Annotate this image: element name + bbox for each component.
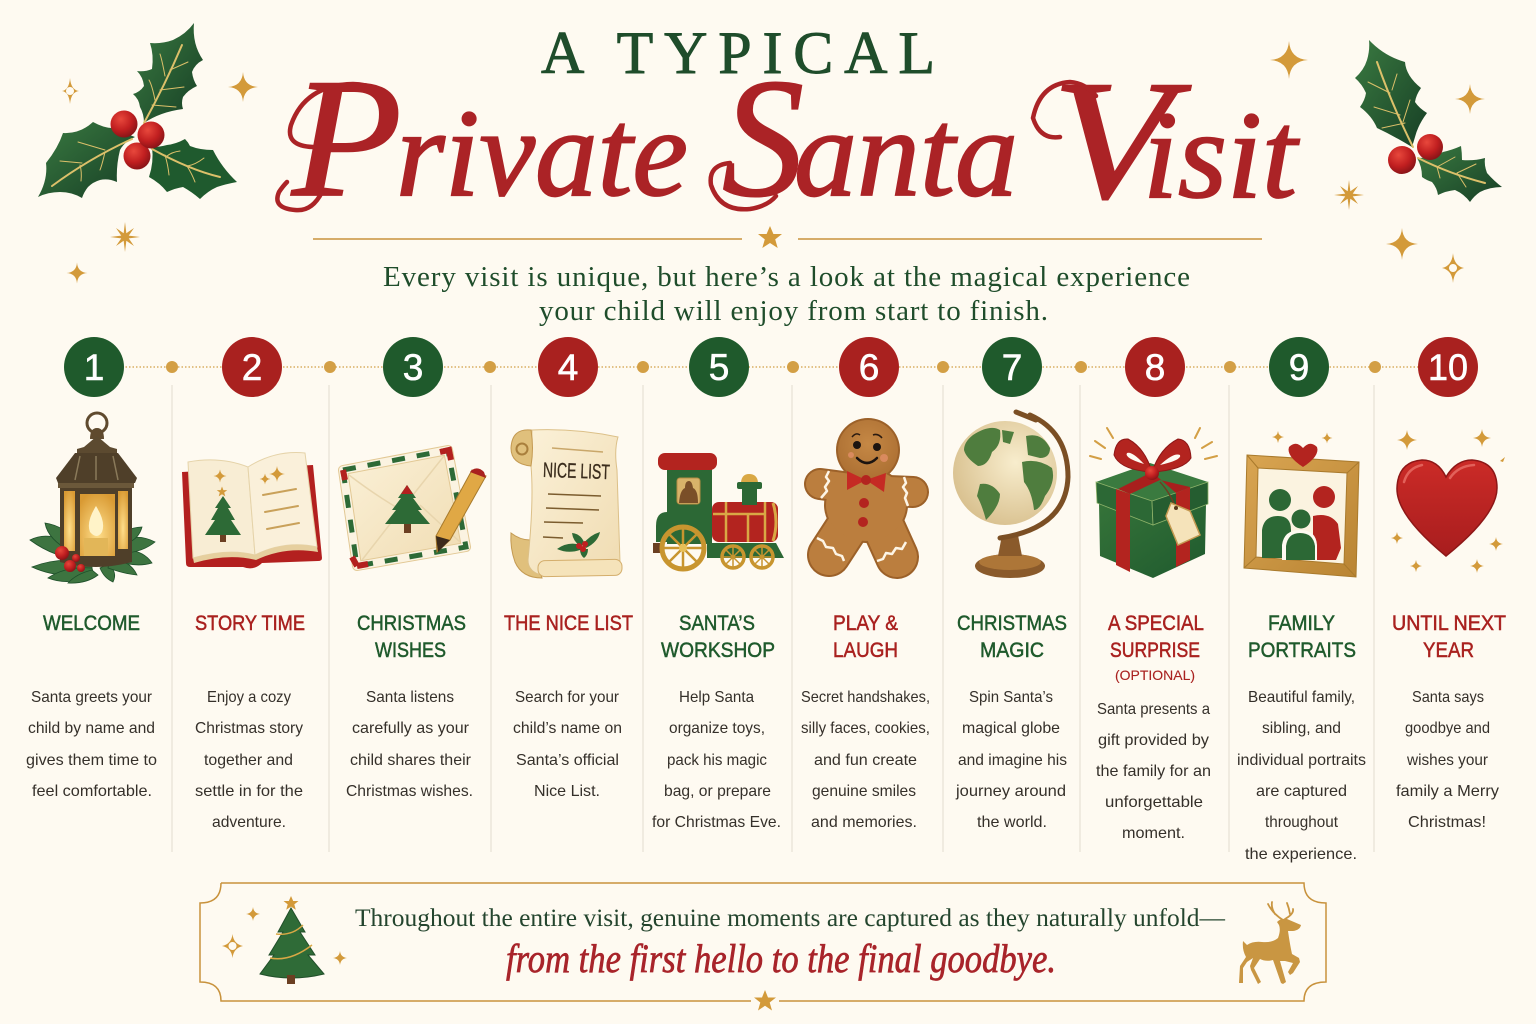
heading: family portraits: PORTRAITS — [1248, 639, 1356, 662]
description: Help Santa — [679, 689, 754, 706]
badge 8 — [1125, 337, 1185, 397]
badge 6: 6 — [859, 347, 879, 388]
panel: step 7 christmas magic — [953, 337, 1068, 831]
title: isit — [1143, 87, 1300, 225]
panel: closing banner — [200, 883, 1326, 1010]
description: together and — [204, 752, 293, 769]
timeline connector — [94, 361, 1448, 852]
description: pack his magic — [667, 752, 767, 769]
description: feel comfortable. — [32, 783, 152, 800]
panel: step 10 until next year — [1391, 337, 1506, 831]
icon: letter and pencil — [343, 450, 486, 566]
sparkles top left — [62, 72, 258, 284]
heading: a special surprise: SURPRISE — [1110, 639, 1200, 662]
description — [1396, 689, 1499, 831]
icon: wrapped gift — [1090, 428, 1217, 578]
heading: christmas wishes — [357, 612, 466, 662]
description — [652, 689, 781, 831]
badge 1: 1 — [84, 347, 104, 388]
badge 7: 7 — [1002, 347, 1022, 388]
icon: nice list scroll — [511, 430, 622, 578]
description: adventure. — [212, 814, 286, 831]
title: A TYPICAL — [541, 20, 935, 86]
description: for Christmas Eve. — [652, 814, 781, 831]
heading: welcome: WELCOME — [43, 612, 140, 635]
heading: christmas magic: CHRISTMAS — [957, 612, 1067, 635]
panel: step 3 christmas wishes — [343, 337, 486, 800]
icon: toy train — [653, 453, 784, 569]
description: Christmas wishes. — [346, 783, 473, 800]
badge 4: 4 — [558, 347, 578, 388]
badge 9: 9 — [1289, 347, 1309, 388]
description: Secret handshakes, — [801, 689, 930, 706]
heading: play and laugh — [833, 612, 898, 662]
heading: play and laugh: PLAY & — [833, 612, 898, 635]
badge 5 — [689, 337, 749, 397]
subtitle: Every visit is unique, but here’s a look at the magical experience — [383, 261, 1190, 293]
description: journey around — [955, 783, 1066, 800]
description: are captured — [1256, 783, 1347, 800]
description: child’s name on — [513, 720, 622, 737]
description: unforgettable — [1105, 794, 1203, 811]
heading: christmas magic: MAGIC — [980, 639, 1044, 662]
heading: christmas wishes: WISHES — [375, 639, 446, 662]
description: the family for an — [1096, 763, 1211, 780]
icon: nice list scroll: NICE LIST — [543, 459, 610, 484]
description: and imagine his — [958, 752, 1067, 769]
description: gives them time to — [26, 752, 157, 769]
panel: step 4 the nice list — [504, 337, 633, 800]
title: anta — [794, 85, 1018, 223]
title — [277, 20, 1300, 234]
badge 10: 10 — [1428, 347, 1468, 388]
description: Enjoy a cozy — [207, 689, 291, 706]
description: the world. — [977, 814, 1047, 831]
heading: a special surprise: A SPECIAL — [1108, 612, 1204, 635]
panel: step 8 a special surprise — [1090, 337, 1217, 842]
description: and memories. — [811, 814, 917, 831]
panel: step 9 family portraits — [1237, 337, 1366, 863]
title: S — [722, 44, 804, 232]
description: throughout — [1265, 814, 1339, 831]
icon: red heart with sparkles — [1391, 429, 1505, 573]
description: gift provided by — [1098, 732, 1209, 749]
heading: story time: STORY TIME — [195, 612, 305, 635]
description: individual portraits — [1237, 752, 1366, 769]
badge 9 — [1269, 337, 1329, 397]
banner script line: from the first hello to the final goodbye. — [506, 936, 1056, 981]
description: Santa presents a — [1097, 701, 1210, 718]
badge 4 — [538, 337, 598, 397]
icon: holly top right — [1355, 40, 1502, 202]
heading: until next year: YEAR — [1423, 639, 1474, 662]
description: Spin Santa’s — [969, 689, 1053, 706]
icon: holly top left — [38, 23, 237, 199]
title: rivate — [396, 85, 688, 223]
description: and fun create — [814, 752, 917, 769]
description — [26, 689, 157, 800]
heading: until next year — [1392, 612, 1506, 662]
badge 1 — [64, 337, 124, 397]
heading: a special surprise — [1108, 612, 1204, 683]
icon: gingerbread man — [817, 418, 913, 561]
panel: step 5 santa's workshop — [652, 337, 784, 831]
description: bag, or prepare — [664, 783, 771, 800]
heading: santa's workshop: WORKSHOP — [661, 639, 775, 662]
badge 2: 2 — [242, 347, 262, 388]
description — [801, 689, 930, 831]
description: child shares their — [350, 752, 472, 769]
description: wishes your — [1406, 752, 1489, 769]
description — [195, 689, 303, 831]
subtitle — [383, 261, 1190, 327]
description — [513, 689, 622, 800]
description: settle in for the — [195, 783, 303, 800]
description: Christmas story — [195, 720, 303, 737]
description: Beautiful family, — [1248, 689, 1355, 706]
title: P — [291, 44, 402, 232]
icon: christmas tree — [222, 896, 347, 984]
panel: step 6 play and laugh — [801, 337, 930, 831]
heading: family portraits — [1248, 612, 1356, 662]
description: magical globe — [962, 720, 1060, 737]
icon: globe — [953, 412, 1068, 578]
badge 8: 8 — [1145, 347, 1165, 388]
title divider with star — [313, 226, 1262, 248]
heading: christmas wishes: CHRISTMAS — [357, 612, 466, 635]
icon: open storybook — [182, 453, 322, 568]
description: family a Merry — [1396, 783, 1499, 800]
description: organize toys, — [669, 720, 765, 737]
description: sibling, and — [1262, 720, 1341, 737]
title: V — [1052, 46, 1192, 234]
badge 10 — [1418, 337, 1478, 397]
heading: a special surprise: (OPTIONAL) — [1115, 667, 1195, 683]
banner text: Throughout the entire visit, genuine moments are captured as they naturally unfold— — [355, 905, 1226, 932]
description: the experience. — [1245, 846, 1357, 863]
subtitle: your child will enjoy from start to finish. — [539, 295, 1048, 327]
panel: step 2 story time — [182, 337, 322, 831]
description: child by name and — [28, 720, 155, 737]
heading: santa's workshop — [661, 612, 775, 662]
badge 3: 3 — [403, 347, 423, 388]
panel: step 1 welcome — [26, 337, 157, 800]
badge 6 — [839, 337, 899, 397]
description: genuine smiles — [812, 783, 916, 800]
description: goodbye and — [1405, 720, 1490, 737]
heading: family portraits: FAMILY — [1268, 612, 1335, 635]
banner frame with star — [200, 883, 1326, 1010]
sparkles top right — [1270, 41, 1485, 283]
badge 2 — [222, 337, 282, 397]
description: silly faces, cookies, — [801, 720, 930, 737]
description: Santa says — [1412, 689, 1484, 706]
badge 7 — [982, 337, 1042, 397]
icon: family portrait frame — [1244, 431, 1359, 577]
heading: santa's workshop: SANTA’S — [679, 612, 755, 635]
heading: play and laugh: LAUGH — [833, 639, 898, 662]
icon: reindeer — [1239, 902, 1301, 984]
heading: until next year: UNTIL NEXT — [1392, 612, 1506, 635]
heading: the nice list: THE NICE LIST — [504, 612, 633, 635]
icon: lantern — [30, 413, 155, 583]
badge 3 — [383, 337, 443, 397]
description: Nice List. — [534, 783, 600, 800]
description — [1096, 701, 1211, 842]
description: Santa’s official — [516, 752, 619, 769]
description: Santa listens — [366, 689, 454, 706]
description — [1237, 689, 1366, 863]
heading: christmas magic — [957, 612, 1067, 662]
description: Search for your — [515, 689, 620, 706]
description — [955, 689, 1067, 831]
description: moment. — [1122, 825, 1185, 842]
description — [346, 689, 473, 800]
description: Santa greets your — [31, 689, 153, 706]
description: Christmas! — [1408, 814, 1486, 831]
description: carefully as your — [352, 720, 470, 737]
badge 5: 5 — [709, 347, 729, 388]
